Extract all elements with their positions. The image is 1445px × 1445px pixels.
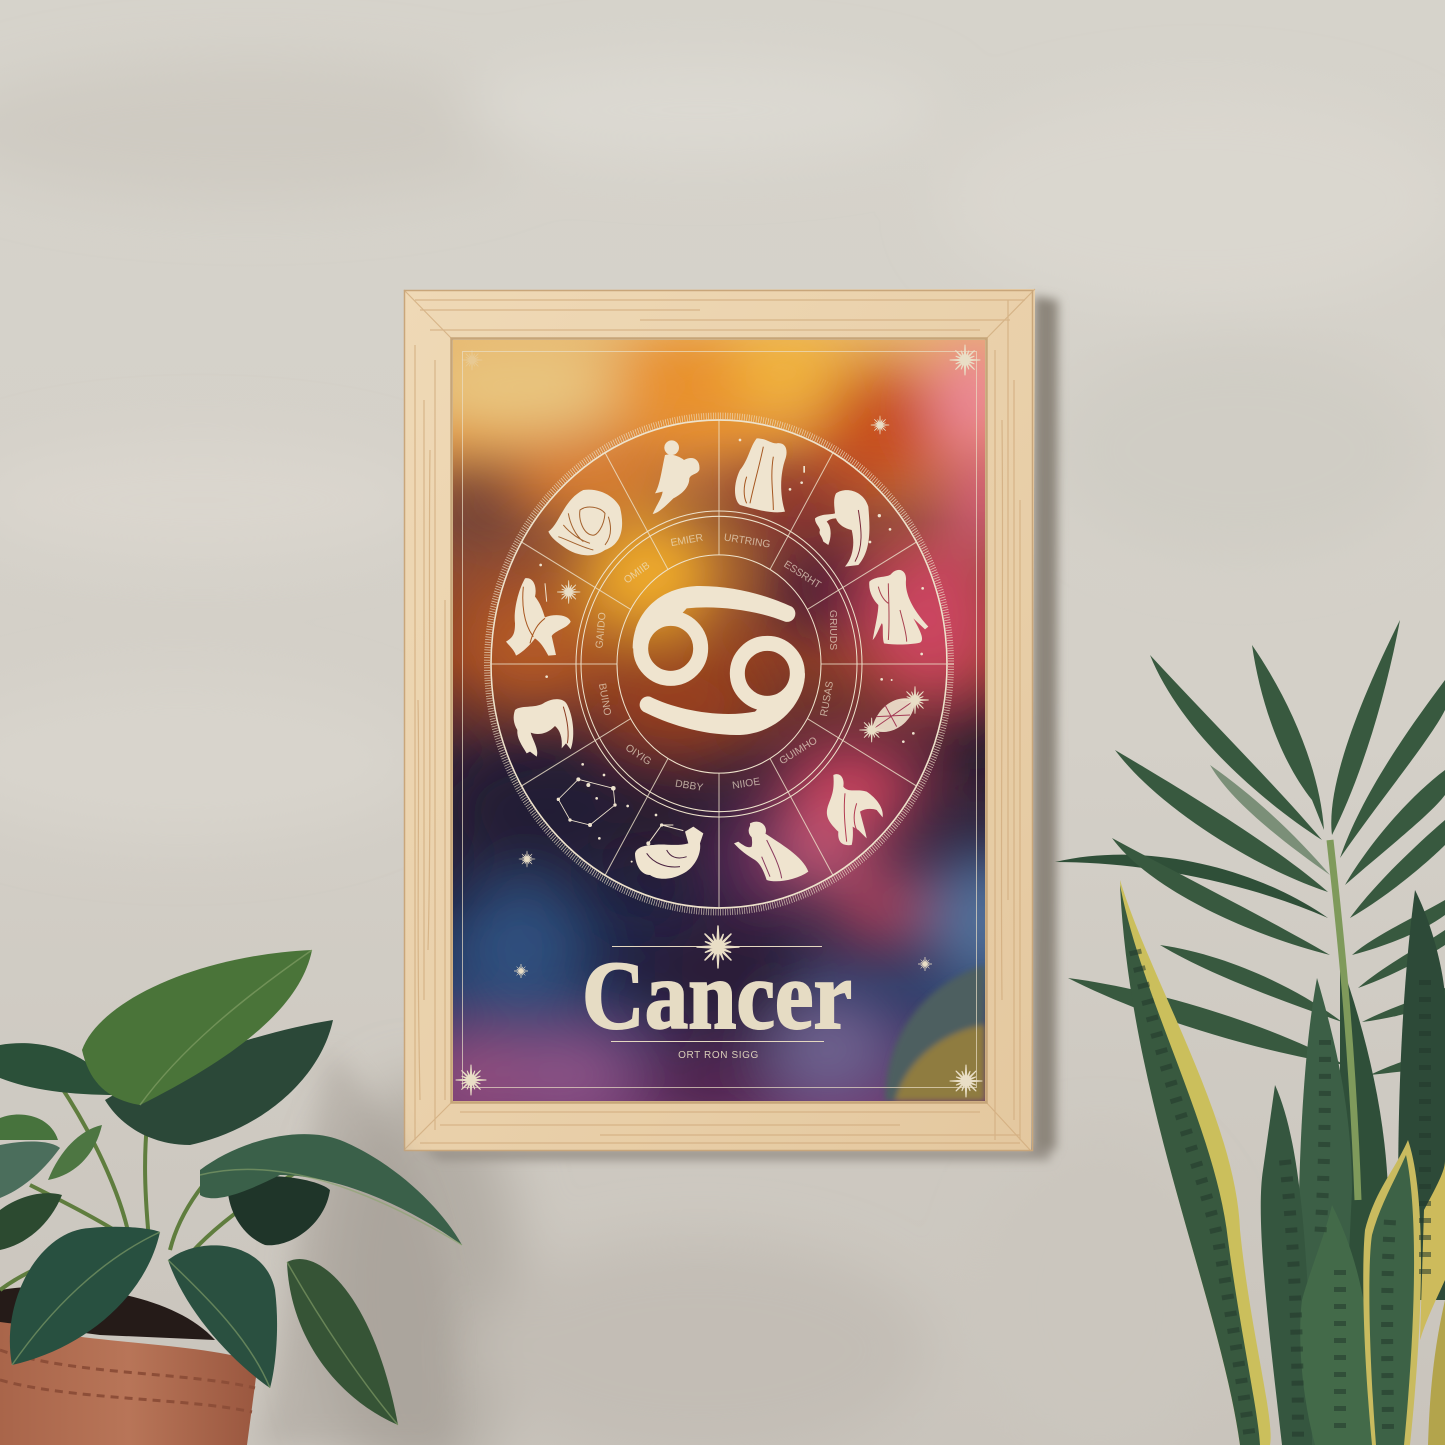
ring labels: GUIMHO xyxy=(778,735,820,767)
snake plant bands xyxy=(1135,950,1425,1440)
figure: seated woman with star xyxy=(506,564,580,656)
zodiac wheel xyxy=(487,416,951,912)
leaves xyxy=(0,950,462,1425)
ring labels: DBBY xyxy=(674,779,704,794)
figure: embracing couple xyxy=(735,438,805,512)
ring labels: RUSAS xyxy=(819,680,836,717)
figure: flowing hair head xyxy=(548,490,622,555)
scattered stars xyxy=(514,416,932,978)
palm stem xyxy=(1330,840,1358,1200)
plant: left potted plant xyxy=(0,950,462,1445)
figure: reclining crowned figure xyxy=(631,814,703,879)
ring labels: ESSRHT xyxy=(781,559,823,592)
corner stars xyxy=(456,345,982,1097)
poster border lines xyxy=(462,352,976,1088)
ring labels: OIYIG xyxy=(623,743,653,768)
ring labels: URTRING xyxy=(723,532,771,551)
ring labels: BUINO xyxy=(596,682,612,717)
figure: horse xyxy=(514,675,573,757)
figure: line constellation xyxy=(557,763,629,840)
ring labels: EMIER xyxy=(670,533,704,549)
figure: centaur archer xyxy=(827,774,883,845)
plant: right palm and snake plant xyxy=(1055,620,1445,1445)
ornament above title xyxy=(612,926,822,968)
ring labels: GAIIDO xyxy=(594,612,609,649)
watercolor background xyxy=(453,340,985,1101)
pot xyxy=(0,1287,258,1445)
frame shadow xyxy=(420,296,1058,1160)
zodiac figures xyxy=(506,438,928,881)
ring labels: NIIOE xyxy=(732,777,761,792)
title: Cancer xyxy=(582,942,852,1050)
shadow of plant xyxy=(260,1050,453,1445)
figure: floating person xyxy=(653,440,699,514)
figure: star constellation lens xyxy=(860,678,928,743)
rule below title xyxy=(611,1041,824,1042)
ring labels: OMIIB xyxy=(622,560,652,586)
figure: caped figure xyxy=(734,822,808,881)
palm fronds xyxy=(1055,620,1445,1075)
stems xyxy=(0,1085,300,1290)
central Cancer symbol xyxy=(633,586,805,735)
leaf veins xyxy=(12,950,462,1425)
ring labels: GRIUDS xyxy=(827,610,838,650)
wooden frame xyxy=(404,289,1035,1151)
poster artwork xyxy=(453,340,985,1101)
snake plant leaves xyxy=(1120,880,1445,1445)
ring labels xyxy=(594,532,838,794)
figure: water bearer xyxy=(815,490,891,567)
figures and labels in wheel xyxy=(506,438,928,881)
small caption: ORT RON SIGG xyxy=(678,1050,759,1061)
figure: twins xyxy=(869,570,928,655)
